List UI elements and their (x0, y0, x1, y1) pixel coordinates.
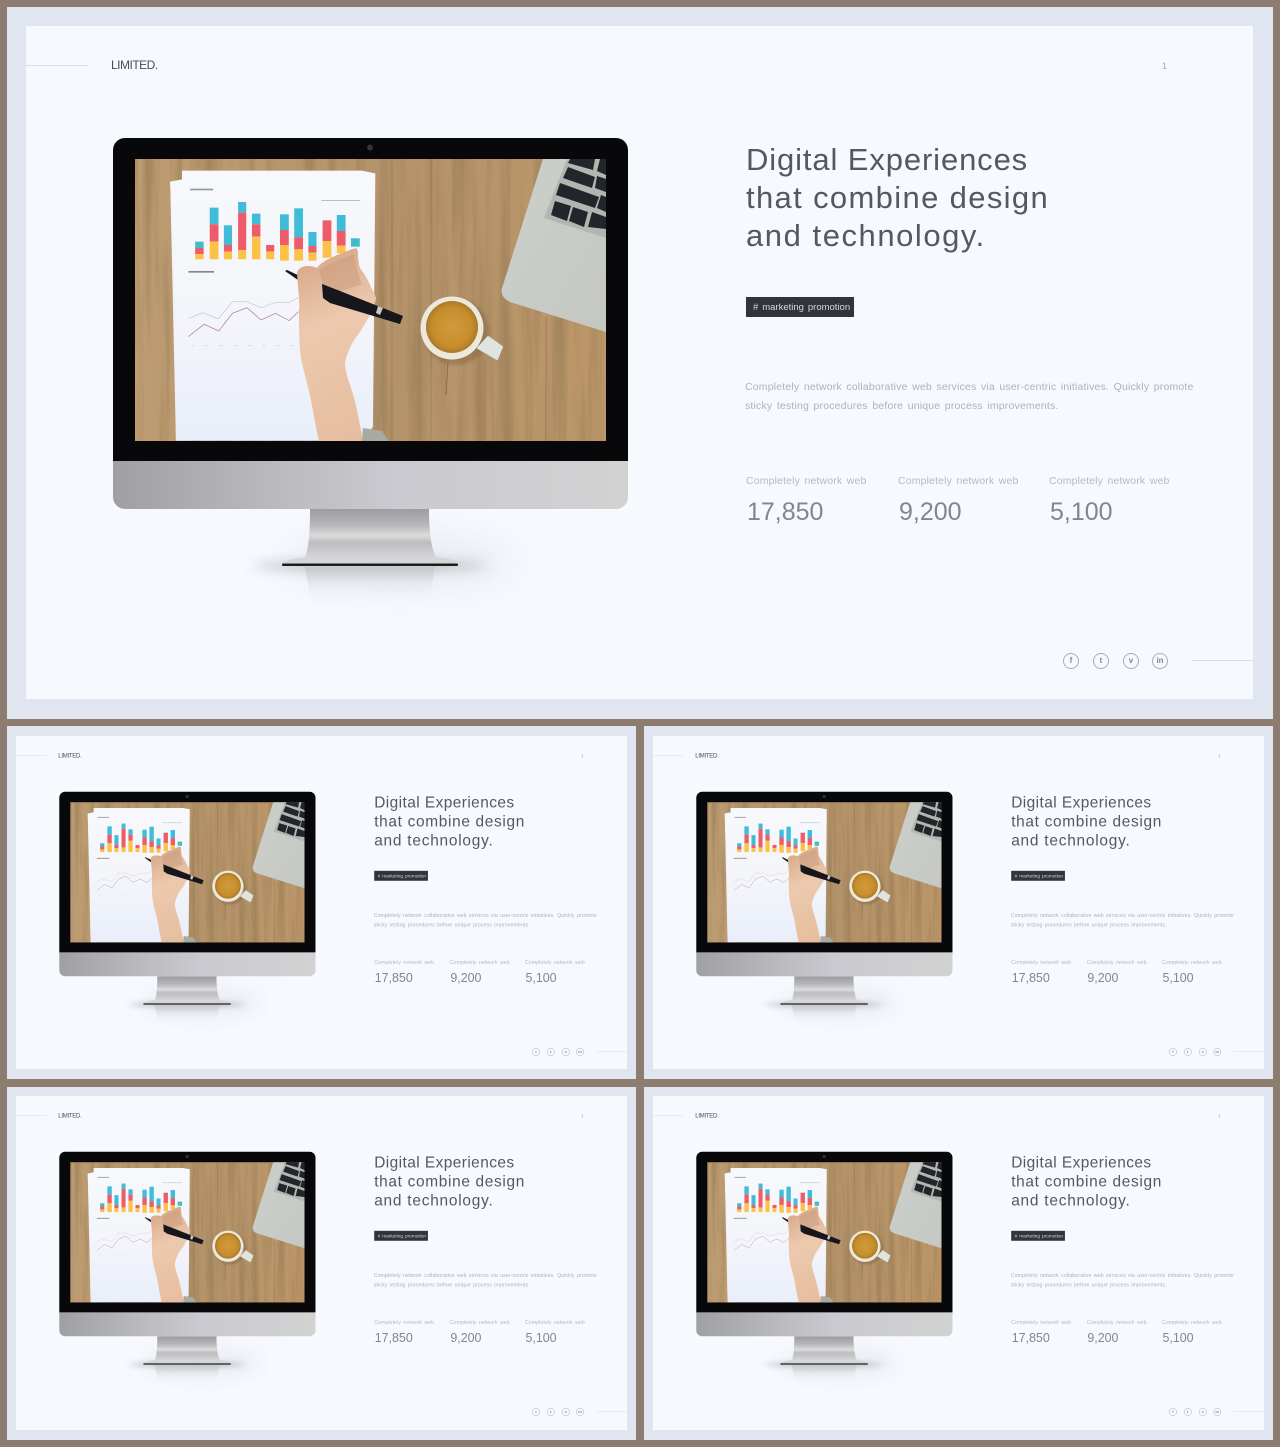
thumbnail slide: top left: Completely network web (525, 959, 585, 965)
title: that combine design (746, 180, 1049, 215)
monitor with desk photo (113, 138, 628, 594)
thumbnail slide: top right: f (1172, 1049, 1174, 1054)
icon: linkedin (1152, 653, 1168, 669)
thumbnail slide: top right: Digital Experiences (1011, 794, 1152, 811)
thumbnail slide: top left: 9,200 (450, 971, 481, 985)
icon: vimeo (1123, 653, 1139, 669)
stat 3: 5,100 (1050, 498, 1113, 526)
thumbnail slide: bottom right: and technology. (1011, 1192, 1131, 1209)
thumbnail slide: top right: Completely network web (1011, 959, 1071, 965)
thumbnail slide: top left: 17,850 (375, 971, 413, 985)
thumbnail slide: top left: t (550, 1049, 551, 1054)
monitor chin (113, 461, 628, 509)
thumbnail slide: top right: Completely network web (1087, 959, 1147, 965)
thumbnail slide: top right: LIMITED. (695, 752, 719, 759)
thumbnail slide: bottom left: sticky testing procedures before unique process improvements. (374, 1282, 530, 1288)
thumbnail slide: bottom left: t (550, 1409, 551, 1414)
thumbnail slide: bottom left: in (578, 1409, 582, 1414)
thumbnail slide: top left (7, 726, 636, 1079)
thumbnail slide: top left: 1 (581, 753, 584, 758)
camera (367, 144, 373, 150)
thumbnail slide: bottom left: LIMITED. (58, 1112, 82, 1119)
main slide panel (7, 7, 1273, 719)
thumbnail slide: top left: # marketing promotion (378, 873, 426, 879)
stat 1 (746, 475, 866, 526)
pen body (322, 284, 403, 324)
stat 2: Completely network web (898, 475, 1018, 487)
icon: facebook (1063, 653, 1079, 669)
thumbnail slide: bottom right: Completely network web (1011, 1319, 1071, 1325)
coffee cup (420, 296, 502, 365)
title (746, 142, 1049, 253)
brand name: LIMITED. (111, 58, 158, 72)
thumbnail slide: bottom left: Completely network web (525, 1319, 585, 1325)
thumbnail slide: bottom right: sticky testing procedures before unique process improvements. (1011, 1282, 1167, 1288)
thumbnail slide: bottom right: 9,200 (1087, 1331, 1118, 1345)
thumbnail slide: top left: and technology. (374, 832, 494, 849)
thumbnail slide: bottom left: Completely network web (450, 1319, 510, 1325)
thumbnail slide: bottom right (644, 1087, 1273, 1440)
pen tip (285, 270, 300, 280)
thumbnail slide: bottom left: f (535, 1409, 537, 1414)
thumbnail slide: top left: Digital Experiences (374, 794, 515, 811)
thumbnail slide: bottom left: that combine design (374, 1173, 525, 1190)
thumbnail slide: top left: 5,100 (525, 971, 557, 985)
tag: # marketing promotion (753, 302, 850, 313)
thumbnail slide: top right (644, 726, 1273, 1079)
description text (745, 381, 1194, 412)
sleeve (362, 428, 389, 441)
thumbnail slide: bottom left: and technology. (374, 1192, 494, 1209)
thumbnail slide: bottom right: 1 (1218, 1113, 1221, 1118)
thumbnail slide: top left: that combine design (374, 813, 525, 830)
thumbnail slide: top right: that combine design (1011, 813, 1162, 830)
thumbnail slide: bottom right: Completely network web (1087, 1319, 1147, 1325)
thumbnail slide: top right: 17,850 (1012, 971, 1050, 985)
title: Digital Experiences (746, 142, 1028, 177)
footer rule (1192, 660, 1254, 661)
thumbnail slide: top right: 9,200 (1087, 971, 1118, 985)
thumbnail slide: bottom left: 5,100 (525, 1331, 557, 1345)
thumbnail slide: bottom right: in (1215, 1409, 1219, 1414)
thumbnail slide: top right: Completely network collaborative web services via user-centric initiatives. Quickly promote (1011, 913, 1234, 919)
thumbnail slide: top left: v (565, 1049, 567, 1054)
header rule (26, 65, 88, 66)
desk shadow (252, 536, 515, 608)
monitor stand (282, 509, 458, 566)
description text: sticky testing procedures before unique process improvements. (745, 400, 1059, 412)
thumbnail slide: top left: LIMITED. (58, 752, 82, 759)
stat 1: 17,850 (747, 498, 823, 526)
thumbnail slide: bottom left: # marketing promotion (378, 1233, 426, 1239)
thumbnail slide: bottom left: Digital Experiences (374, 1154, 515, 1171)
thumbnail slide: bottom right: Completely network collaborative web services via user-centric initiatives. Quickly promote (1011, 1273, 1234, 1279)
paper sheets (170, 171, 375, 441)
icon: twitter: t (1100, 656, 1102, 665)
icon: vimeo: v (1129, 656, 1133, 665)
thumbnail slide: bottom right: # marketing promotion (1015, 1233, 1063, 1239)
thumbnail slide: bottom left: 17,850 (375, 1331, 413, 1345)
thumbnail slide: bottom right: Completely network web (1162, 1319, 1222, 1325)
thumbnail slide: top left: Completely network collaborative web services via user-centric initiatives. Quickly promote (374, 913, 597, 919)
thumbnail slide: top left: Completely network web (450, 959, 510, 965)
thumbnail slide: top right: sticky testing procedures before unique process improvements. (1011, 922, 1167, 928)
stat 3 (1049, 475, 1169, 526)
thumbnail slide: top left: sticky testing procedures before unique process improvements. (374, 922, 530, 928)
thumbnail slide: bottom right: v (1202, 1409, 1204, 1414)
laptop (502, 159, 606, 332)
desk photo (135, 159, 606, 441)
thumbnail slide: top right: # marketing promotion (1015, 873, 1063, 879)
thumbnail slide: top left: in (578, 1049, 582, 1054)
stacked bar chart on paper (188, 189, 360, 273)
thumbnail slide: bottom left: Completely network collaborative web services via user-centric initiatives. Quickly promote (374, 1273, 597, 1279)
stat 1: Completely network web (746, 475, 866, 487)
thumbnail slide: top right: t (1187, 1049, 1188, 1054)
line chart on paper (188, 298, 353, 346)
finger shadow (319, 254, 362, 296)
stat 2 (898, 475, 1018, 526)
thumbnail slide: bottom left: 1 (581, 1113, 584, 1118)
thumbnail slide: top right: and technology. (1011, 832, 1131, 849)
thumbnail slide: top right: v (1202, 1049, 1204, 1054)
description text: Completely network collaborative web services via user-centric initiatives. Quickly promote (745, 381, 1194, 393)
thumbnail slide: bottom right: f (1172, 1409, 1174, 1414)
thumbnail slide: bottom left: 9,200 (450, 1331, 481, 1345)
stat 2: 9,200 (899, 498, 962, 526)
thumbnail slide: bottom left: v (565, 1409, 567, 1414)
icon: linkedin: in (1156, 656, 1164, 665)
thumbnail slide: bottom right: that combine design (1011, 1173, 1162, 1190)
thumbnail slide: bottom right: LIMITED. (695, 1112, 719, 1119)
icon: twitter (1093, 653, 1109, 669)
icon: facebook: f (1070, 656, 1072, 665)
thumbnail slide: top left: f (535, 1049, 537, 1054)
tag (746, 297, 854, 317)
thumbnail slide: top left: Completely network web (374, 959, 434, 965)
thumbnail slide: bottom left (7, 1087, 636, 1440)
thumbnail slide: top right: in (1215, 1049, 1219, 1054)
thumbnail slide: bottom right: Digital Experiences (1011, 1154, 1152, 1171)
stat 3: Completely network web (1049, 475, 1169, 487)
wood table (135, 159, 606, 441)
thumbnail slide: bottom right: t (1187, 1409, 1188, 1414)
monitor bezel (113, 138, 628, 461)
page number: 1 (1162, 61, 1167, 71)
thumbnail slide: bottom left: Completely network web (374, 1319, 434, 1325)
thumbnail slide: top right: Completely network web (1162, 959, 1222, 965)
hand (297, 248, 376, 441)
thumbnail slide: bottom right: 17,850 (1012, 1331, 1050, 1345)
title: and technology. (746, 218, 986, 253)
thumbnail slide: top right: 5,100 (1162, 971, 1194, 985)
thumbnail slide: top right: 1 (1218, 753, 1221, 758)
thumbnail slide: bottom right: 5,100 (1162, 1331, 1194, 1345)
